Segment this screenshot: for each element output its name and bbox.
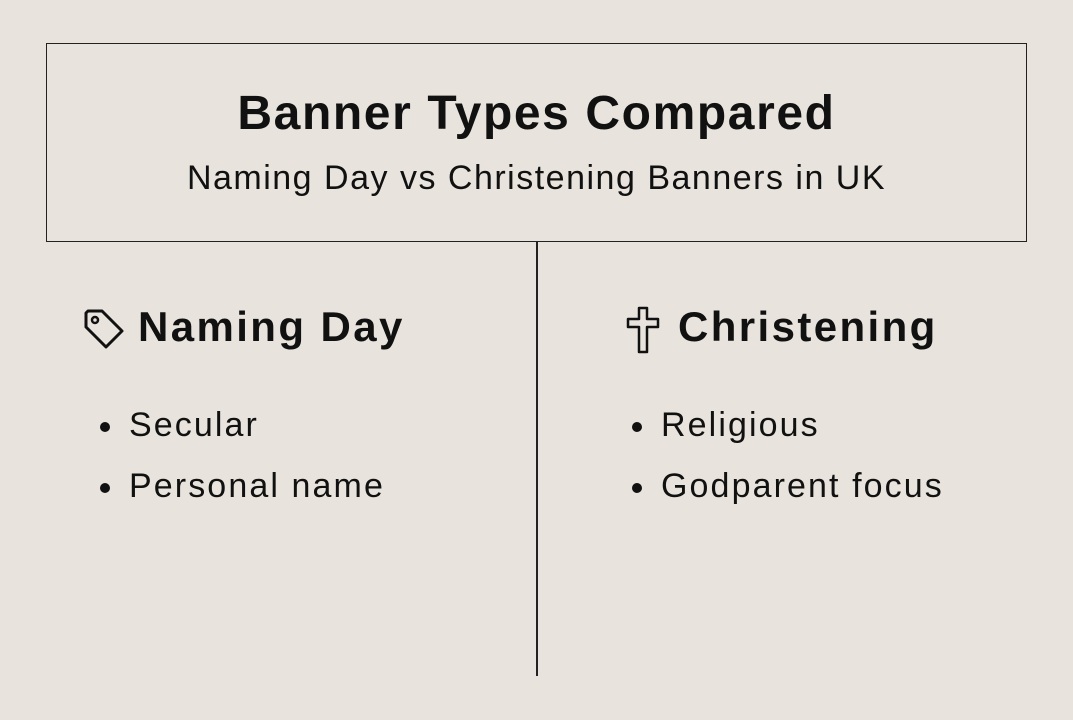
bullet list: Religious [661, 406, 820, 444]
panel: naming day [84, 303, 405, 505]
heading: naming day: Naming Day [138, 303, 405, 350]
heading: christening: Christening [678, 303, 938, 350]
panel: christening [626, 303, 944, 505]
bullet list: Godparent focus [661, 467, 944, 505]
title: Banner Types Compared [237, 87, 836, 140]
bullet list: Personal name [129, 467, 385, 505]
icon: tag [84, 310, 124, 349]
bullet list [632, 406, 944, 505]
icon: cross [626, 306, 660, 354]
bullet list: Secular [129, 406, 259, 444]
title box [46, 43, 1027, 242]
subtitle: Naming Day vs Christening Banners in UK [187, 159, 886, 197]
vertical divider [536, 242, 538, 676]
bullet list [100, 406, 385, 505]
